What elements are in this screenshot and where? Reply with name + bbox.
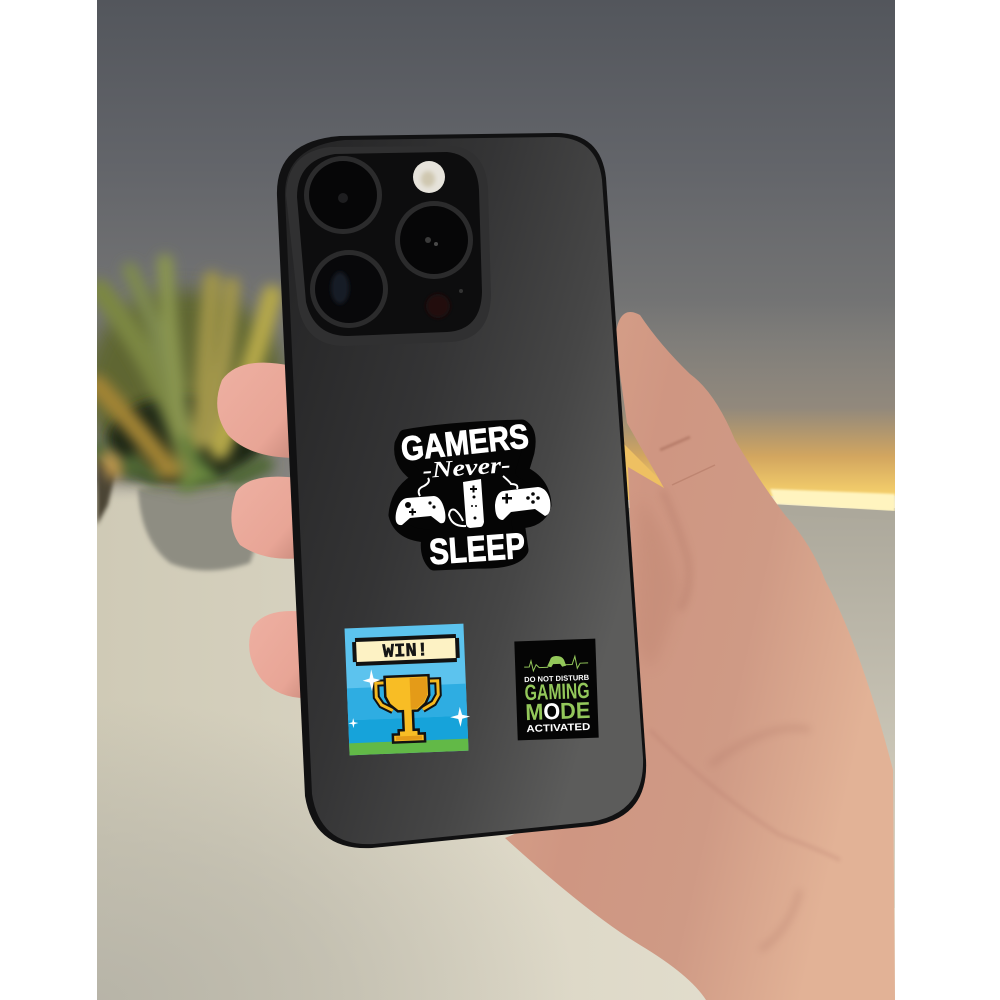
table surface [97, 480, 895, 1000]
sticker heading SLEEP: SLEEP [428, 525, 526, 572]
text: do not disturb: DO NOT DISTURB [524, 673, 590, 684]
text: gaming: GAMING [524, 678, 590, 705]
hand: middle finger [231, 476, 294, 559]
text: activated: ACTIVATED [526, 722, 591, 735]
camera island [286, 146, 491, 346]
sparkles [348, 670, 470, 728]
product photo: phone with stickers held in hand [97, 0, 895, 1000]
plant in pot [85, 262, 285, 570]
wall area right of hand and below light [620, 508, 895, 908]
flash [413, 161, 445, 193]
camera lens bottom [310, 250, 388, 328]
camera lens top [304, 156, 382, 234]
hand: index finger [217, 363, 296, 458]
sticker heading GAMERS: GAMERS [399, 417, 530, 469]
hand: palm and thumb [505, 312, 895, 1000]
sticker script Never: -Never- [422, 452, 511, 483]
heartbeat line with controller icon [524, 655, 588, 671]
sticker: gaming mode activated [514, 639, 599, 740]
icon: left game controller [396, 496, 445, 525]
phone body [277, 133, 646, 848]
sticker: Gamers Never Sleep [395, 417, 550, 572]
icon: remote controller [449, 479, 484, 528]
light strip glow [620, 344, 895, 511]
hand: ring finger [249, 611, 300, 698]
icon: right game controller [495, 487, 550, 520]
text: mode: MODE [525, 697, 591, 725]
sticker: WIN trophy [345, 624, 472, 755]
camera lens right [395, 201, 473, 279]
icon: trophy [376, 675, 440, 743]
win banner: WIN! [382, 639, 429, 663]
